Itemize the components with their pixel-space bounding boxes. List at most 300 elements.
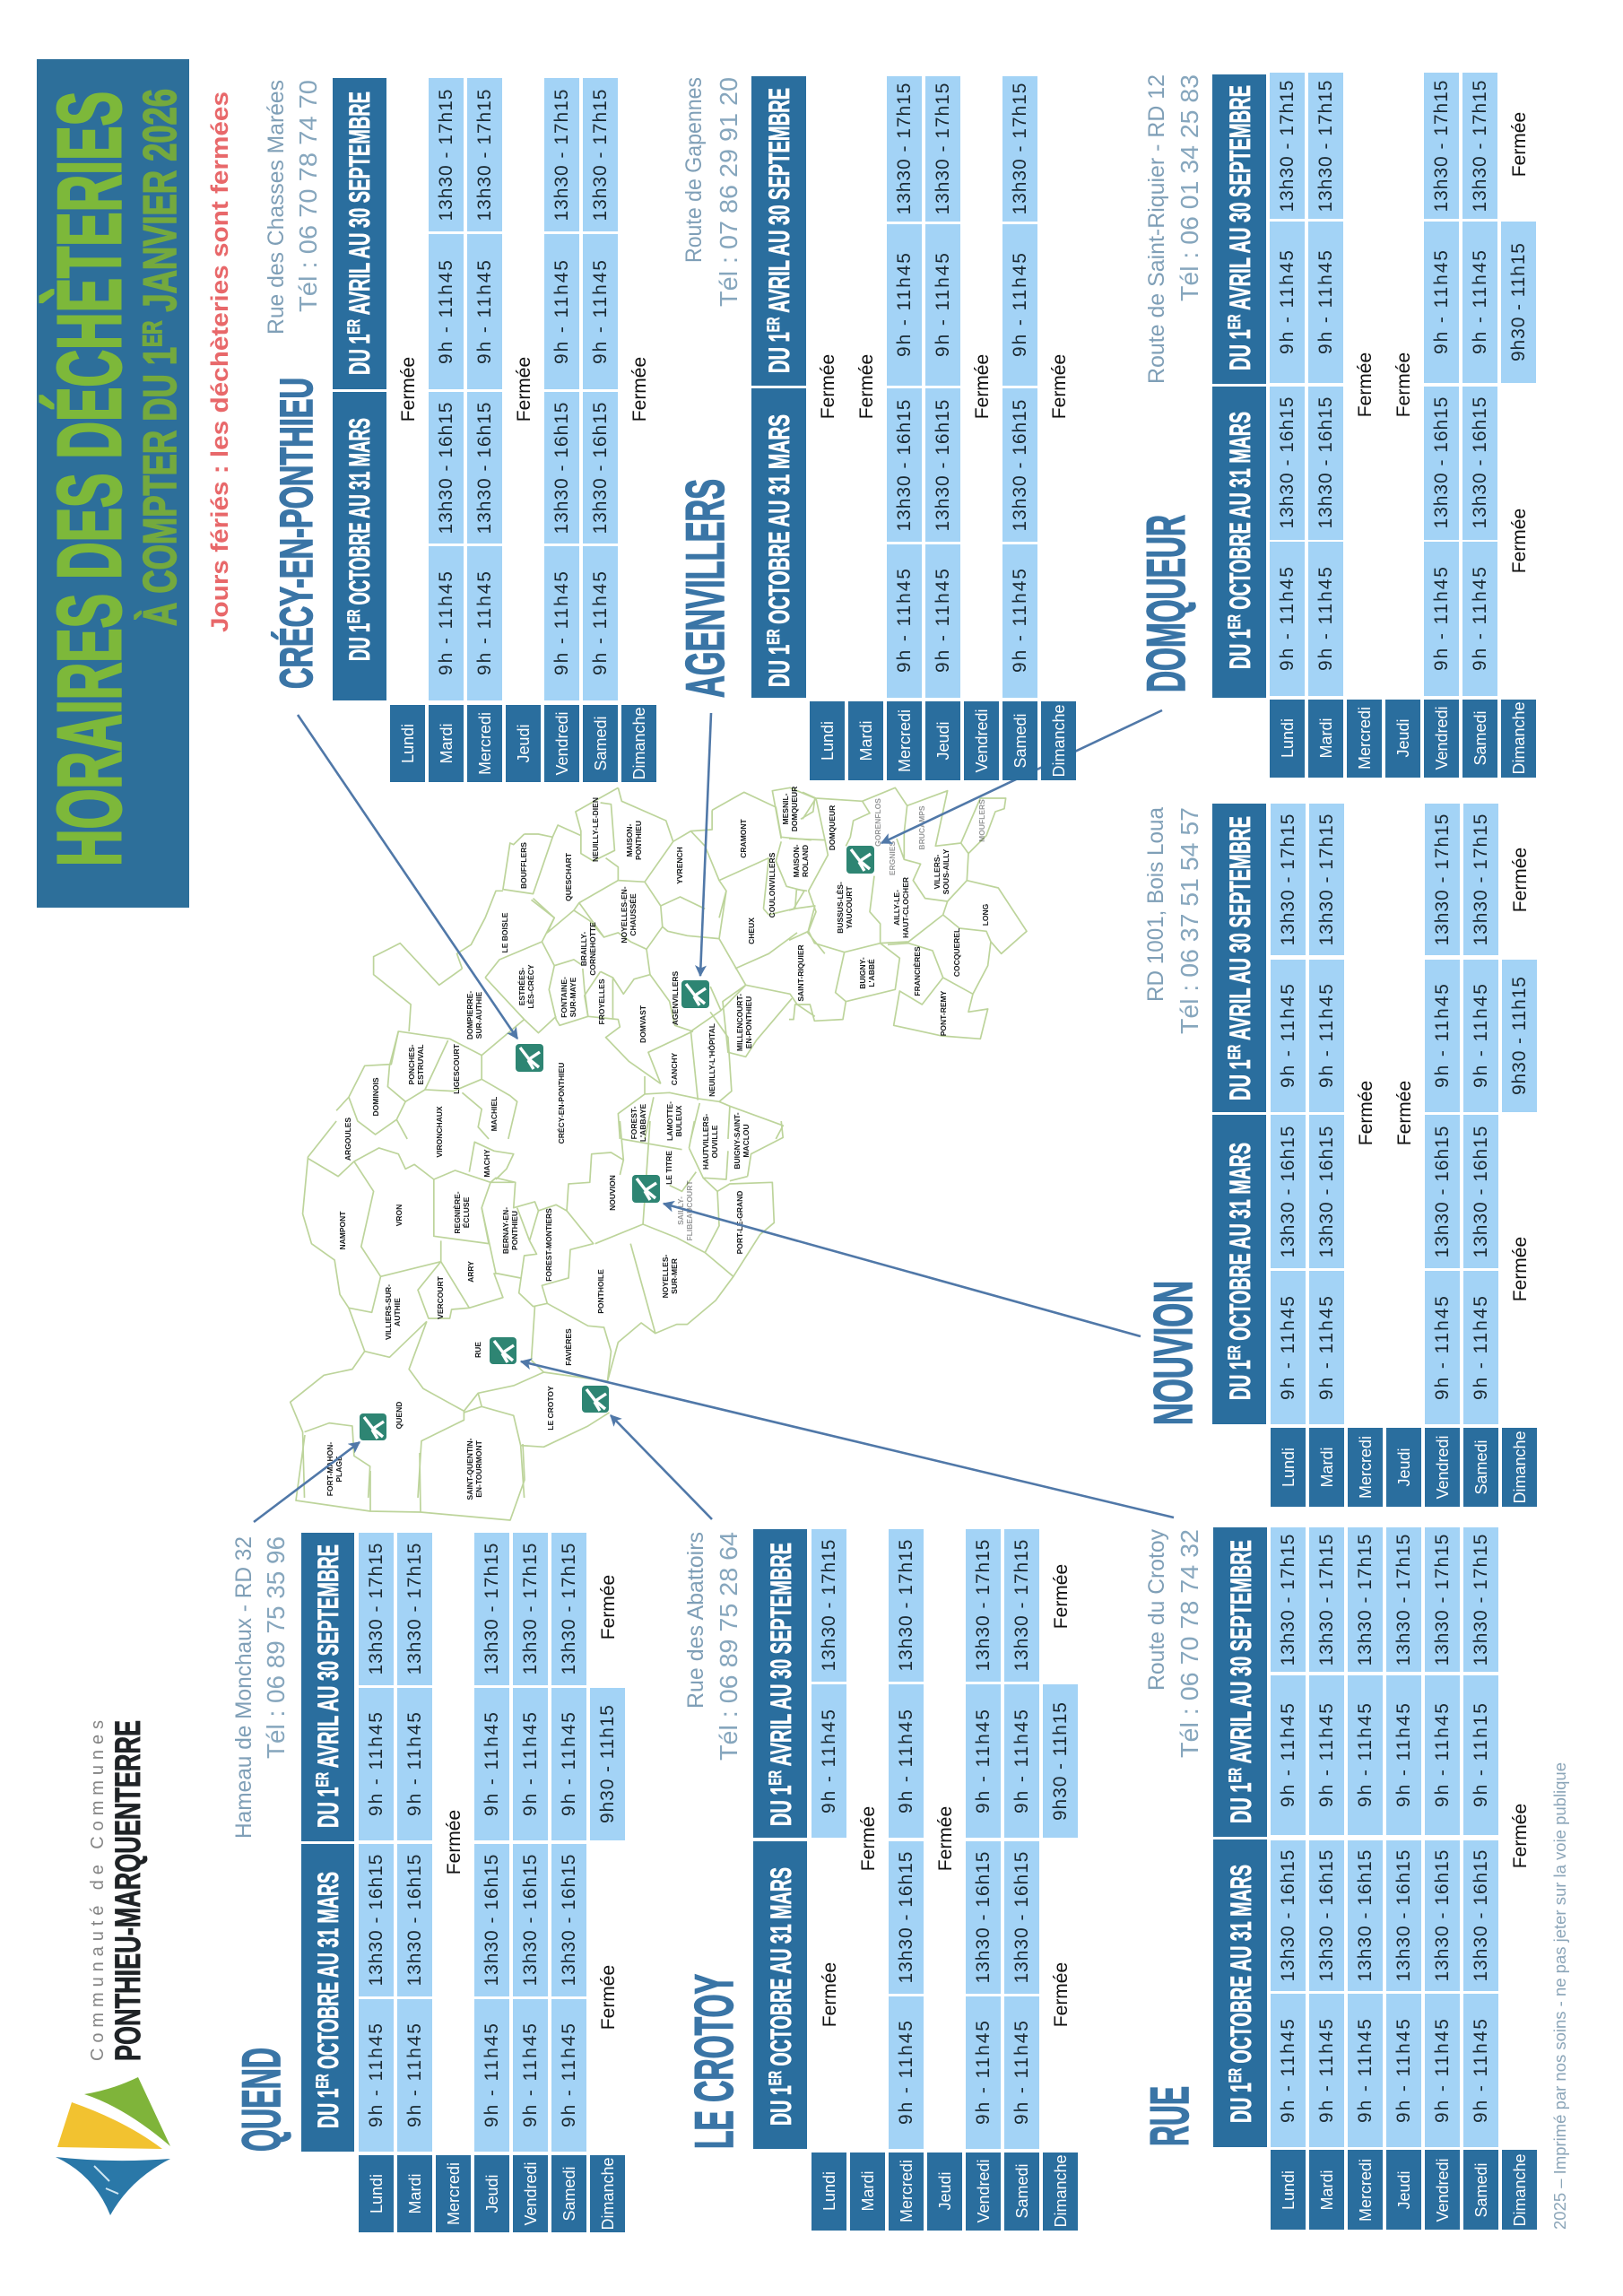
commune labels: BULEUX	[674, 1105, 683, 1136]
row: Samedi: 9h - 11h45	[1470, 250, 1490, 354]
row: Mardi: Mardi	[438, 723, 456, 764]
commune labels: SAINT-QUENTIN-	[465, 1438, 474, 1500]
commune labels: LE CROTOY	[546, 1386, 555, 1431]
address: Nouvion: Tél : 06 37 51 54 57	[1176, 807, 1203, 1034]
row: Mercredi: 9h - 11h45	[894, 569, 915, 673]
row: Dimanche: Fermée	[1510, 1804, 1531, 1868]
row: Dimanche	[1043, 1564, 1078, 2231]
row: Dimanche: Fermée	[1051, 1564, 1072, 1629]
table: Domqueur hours: ER	[1226, 314, 1245, 329]
row: Vendredi: 9h - 11h45	[1432, 984, 1453, 1088]
row: Jeudi	[1386, 1527, 1421, 2230]
commune labels: OUVILLE	[710, 1125, 719, 1158]
commune labels: CRÉCY-EN-PONTHIEU	[557, 1063, 566, 1144]
commune labels: FORT-MAHON-	[325, 1442, 334, 1496]
row: Mercredi: 13h30 - 16h15	[474, 402, 495, 535]
heading: Quend: QUEND	[231, 2048, 291, 2152]
row: Jeudi: Jeudi	[936, 2171, 954, 2211]
table: Agenvillers hours	[751, 76, 1076, 780]
commune labels: FAVIÈRES	[564, 1328, 573, 1366]
row: Dimanche: Dimanche	[630, 707, 648, 780]
row: Mardi: Fermée	[858, 1806, 879, 1871]
row: Vendredi: 9h - 11h45	[973, 2021, 994, 2125]
commune labels: COULONVILLERS	[768, 852, 777, 918]
row: Samedi: 9h - 11h45	[1010, 253, 1030, 357]
row: Lundi: 13h30 - 17h15	[819, 1539, 839, 1672]
table: Quend hours: DU 1	[312, 2063, 344, 2128]
commune labels: FOREST-	[629, 1106, 638, 1139]
logo: Communauté de Communes Ponthieu-Marquenterre	[56, 1720, 170, 2215]
address: Nouvion: RD 1001, Bois Loua	[1143, 807, 1168, 1002]
commune labels: YVRENCH	[675, 847, 684, 884]
icon: Quend site marker	[360, 1413, 386, 1440]
commune labels	[325, 787, 990, 1500]
row: Samedi	[1463, 804, 1498, 1507]
row: Mardi: 13h30 - 17h15	[1315, 81, 1336, 212]
table: Le Crotoy hours	[753, 1529, 1078, 2231]
row: Mardi: 13h30 - 17h15	[404, 1543, 425, 1675]
row: Vendredi	[1425, 804, 1460, 1507]
commune labels: REGNIÈRE-	[453, 1191, 462, 1234]
commune labels: VILLERS-	[933, 854, 942, 889]
address: Agenvillers: Tél : 07 86 29 91 20	[715, 77, 742, 307]
row: Jeudi: 13h30 - 17h15	[1393, 1534, 1414, 1666]
row: Mercredi: Fermée	[444, 1810, 464, 1874]
commune labels: FONTAINE-	[560, 977, 568, 1018]
address: Quend: Hameau de Monchaux - RD 32	[231, 1536, 256, 1839]
row: Samedi: 13h30 - 17h15	[590, 90, 611, 221]
address: Crécy-en-Ponthieu: Tél : 06 70 78 74 70	[294, 80, 322, 312]
row: Samedi: Samedi	[592, 716, 610, 771]
table: Domqueur hours: DU 1	[1224, 305, 1256, 370]
commune labels: CHEUX	[747, 918, 756, 944]
row: Vendredi: 9h - 11h45	[1431, 250, 1452, 354]
icon: Rue site marker	[490, 1337, 516, 1364]
row: Dimanche: Dimanche	[599, 2157, 617, 2231]
table: Agenvillers hours: DU 1	[763, 308, 795, 373]
row: Mardi: 9h - 11h45	[436, 260, 456, 364]
address: Nouvion	[1143, 807, 1203, 1034]
address: Crécy-en-Ponthieu: Rue des Chasses Marées	[264, 80, 289, 335]
row: Lundi: 13h30 - 16h15	[1278, 1126, 1298, 1257]
row: Mardi	[1308, 73, 1343, 778]
commune labels: FOREST-MONTIERS	[544, 1208, 553, 1282]
table: Nouvion hours: AVRIL AU 30 SEPTEMBRE	[1224, 816, 1256, 1045]
commune labels: PONTHIEU	[634, 821, 643, 860]
row: Lundi: Lundi	[399, 724, 417, 763]
row: Lundi	[1270, 73, 1305, 778]
arrow: Le Crotoy	[611, 1415, 712, 1519]
heading: Nouvion: NOUVION	[1143, 1281, 1203, 1425]
commune labels: COCQUEREL	[952, 928, 961, 977]
row: Mercredi: Mercredi	[896, 709, 914, 772]
commune labels: BERNAY-EN-	[501, 1207, 510, 1254]
table: Nouvion hours	[1212, 804, 1537, 1507]
commune labels: PLAGE	[334, 1456, 343, 1483]
table: Agenvillers hours: OCTOBRE AU 31 MARS	[763, 414, 795, 630]
commune labels: PONCHES-	[407, 1044, 416, 1084]
commune labels: DOMQUEUR	[828, 805, 837, 850]
commune labels: VILLIERS-SUR-	[384, 1284, 393, 1340]
panel: Quend	[231, 1533, 625, 2232]
panel: Le Crotoy	[683, 1529, 1078, 2231]
row: Dimanche: 9h30 - 11h15	[1509, 977, 1530, 1095]
row: Mercredi	[1348, 1081, 1383, 1507]
address: Crécy-en-Ponthieu	[264, 80, 322, 335]
row: Mardi: 13h30 - 16h15	[1316, 1849, 1337, 1982]
table: Le Crotoy hours: ER	[767, 1770, 785, 1786]
commune labels: YAUCOURT	[845, 886, 854, 929]
row: Lundi: 9h - 11h45	[1278, 2019, 1298, 2123]
commune labels: SUR-MER	[670, 1258, 679, 1294]
row: Lundi: Lundi	[819, 721, 837, 761]
row: Vendredi	[544, 78, 579, 782]
row: Mardi: Fermée	[856, 354, 877, 419]
row: Vendredi: 13h30 - 17h15	[520, 1543, 541, 1675]
commune labels: AILLY-LE-	[892, 890, 901, 926]
row: Lundi: Lundi	[820, 2171, 838, 2211]
row: Samedi: 13h30 - 16h15	[1011, 1851, 1032, 1984]
commune labels: CRAMONT	[739, 818, 748, 858]
row: Vendredi: 9h - 11h45	[520, 2023, 541, 2127]
row: Samedi: 13h30 - 16h15	[1471, 1849, 1491, 1982]
row: Mercredi: 9h - 11h45	[894, 253, 915, 357]
row: Jeudi	[474, 1533, 509, 2232]
arrow: Domqueur	[881, 710, 1162, 843]
row: Mercredi: 9h - 11h45	[896, 1709, 916, 1813]
row: Jeudi: Fermée	[935, 1806, 956, 1871]
row: Samedi: 13h30 - 17h15	[1010, 83, 1030, 215]
commune labels: BRAILLY-	[579, 932, 588, 966]
commune labels: NEUILLY-LE-DIEN	[591, 797, 600, 862]
row: Samedi: 9h - 11h45	[1471, 1296, 1491, 1400]
arrow: Quend	[254, 1442, 360, 1522]
row: Mardi: 9h - 11h45	[1316, 1296, 1337, 1400]
table: Quend hours: AVRIL AU 30 SEPTEMBRE	[312, 1544, 344, 1772]
row: Dimanche	[590, 1575, 625, 2232]
table: Domqueur hours: OCTOBRE AU 31 MARS	[1224, 412, 1256, 614]
row: Samedi	[1462, 73, 1497, 778]
commune labels: FRANCIÈRES	[913, 946, 922, 996]
row: Mercredi: 13h30 - 17h15	[894, 83, 915, 215]
row: Mardi: Mardi	[857, 720, 875, 761]
table: Agenvillers hours: ER	[765, 629, 784, 645]
row: Samedi: Samedi	[1472, 2162, 1490, 2218]
table: Crécy-en-Ponthieu hours	[333, 78, 656, 782]
row: Mercredi: Fermée	[1355, 352, 1376, 417]
icon: Crécy site marker	[516, 1044, 543, 1072]
commune labels: PONTHOILE	[596, 1269, 605, 1314]
row: Mardi	[848, 354, 883, 780]
panel: Nouvion	[1143, 804, 1537, 1507]
row: Dimanche: Fermée	[1510, 1237, 1531, 1301]
address: Domqueur: Tél : 06 01 34 25 83	[1176, 74, 1203, 301]
table: Crécy-en-Ponthieu hours: ER	[345, 609, 364, 623]
address: Quend: Tél : 06 89 75 35 96	[262, 1536, 290, 1759]
row: Dimanche	[1041, 354, 1076, 780]
row: Dimanche: Dimanche	[1511, 2153, 1529, 2227]
icon: Domqueur site marker	[846, 846, 874, 874]
table: Nouvion hours: ER	[1226, 1045, 1245, 1059]
row: Jeudi: Fermée	[1394, 1081, 1415, 1145]
commune labels: MAISON-	[792, 844, 801, 877]
row: Mercredi: 13h30 - 17h15	[474, 90, 495, 221]
table: Quend hours: DU 1	[312, 1762, 344, 1828]
row: Mardi: 9h - 11h45	[1316, 984, 1337, 1088]
row: Samedi: 13h30 - 16h15	[559, 1855, 579, 1986]
commune labels: EN-TOURMONT	[474, 1439, 483, 1498]
commune labels: CORNEHOTTE	[588, 922, 597, 976]
commune labels: EN-PONTHIEU	[744, 996, 753, 1048]
row: Mardi: Mardi	[1318, 2170, 1336, 2211]
row: Mardi: 9h - 11h45	[436, 571, 456, 675]
row: Mardi: 9h - 11h45	[1316, 2019, 1337, 2123]
commune labels: LE TITRE	[664, 1151, 673, 1185]
row: Samedi: 13h30 - 17h15	[559, 1543, 579, 1675]
panel: Crécy-en-Ponthieu	[264, 78, 656, 782]
row: Samedi: 9h - 11h45	[1470, 567, 1490, 671]
row: Samedi: 9h - 11h15	[1471, 1703, 1491, 1807]
map of communes	[291, 787, 1027, 1520]
address: Rue: Route du Crotoy	[1144, 1529, 1169, 1691]
row: Vendredi: 13h30 - 17h15	[1432, 814, 1453, 945]
commune labels: MESNIL-	[781, 793, 790, 824]
commune labels: DOMQUEUR	[790, 787, 799, 831]
row: Dimanche: Fermée	[1051, 1962, 1072, 2027]
row: Lundi: 9h - 11h45	[1277, 250, 1298, 354]
row: Lundi: 13h30 - 17h15	[366, 1543, 386, 1675]
table: Quend hours: ER	[314, 2074, 333, 2089]
row: Jeudi	[1385, 352, 1420, 778]
commune labels: SOUS-AILLY	[942, 848, 950, 894]
commune labels: ESTRÉES-	[517, 968, 526, 1005]
row: Lundi: 13h30 - 17h15	[1278, 1534, 1298, 1666]
row: Lundi	[359, 1533, 394, 2232]
row: Vendredi: 9h - 11h45	[520, 1712, 541, 1816]
icon: Agenvillers site marker	[681, 980, 709, 1008]
row: Vendredi: Fermée	[972, 354, 993, 419]
row: Vendredi: 9h - 11h45	[551, 571, 572, 675]
row: Samedi: Samedi	[560, 2166, 578, 2222]
commune labels: SAILLY-	[676, 1196, 685, 1225]
commune labels: LIGESCOURT	[452, 1043, 461, 1094]
commune labels: AGENVILLERS	[671, 970, 680, 1025]
row: Lundi: 9h - 11h45	[819, 1709, 839, 1813]
row: Mardi: 13h30 - 16h15	[436, 402, 456, 535]
row: Mercredi: Mercredi	[476, 712, 494, 775]
row: Vendredi: 13h30 - 16h15	[973, 1851, 994, 1984]
table: Agenvillers hours: DU 1	[763, 622, 795, 687]
row: Mercredi	[1347, 352, 1382, 778]
row: Vendredi: 13h30 - 16h15	[1432, 1126, 1453, 1257]
row: Vendredi: 9h - 11h45	[973, 1709, 994, 1813]
row: Dimanche	[1501, 112, 1536, 778]
table: Crécy-en-Ponthieu hours: DU 1	[343, 596, 376, 661]
row: Jeudi: Jeudi	[1395, 2170, 1413, 2210]
table: Le Crotoy hours: DU 1	[765, 1761, 797, 1826]
table: Rue hours: ER	[1227, 1768, 1245, 1783]
row: Mardi	[1309, 1527, 1344, 2230]
row: Samedi: 13h30 - 17h15	[1471, 814, 1491, 945]
table: Nouvion hours: OCTOBRE AU 31 MARS	[1224, 1143, 1256, 1345]
heading: Domqueur: DOMQUEUR	[1136, 515, 1196, 692]
row: Mardi: 9h - 11h45	[404, 1712, 425, 1816]
row: Vendredi	[513, 1533, 548, 2232]
table: Rue hours	[1213, 1527, 1537, 2230]
row: Jeudi	[927, 1806, 962, 2231]
table: Nouvion hours: DU 1	[1224, 1335, 1256, 1400]
arrow: Crécy	[298, 715, 517, 1039]
row: Jeudi: 9h - 11h45	[482, 1712, 502, 1816]
row: Dimanche	[1502, 1804, 1537, 2230]
row: Dimanche	[621, 357, 656, 782]
commune labels: ARGOULES	[343, 1118, 352, 1161]
row: Vendredi: 13h30 - 16h15	[520, 1855, 541, 1986]
row: Lundi: 9h - 11h45	[1278, 984, 1298, 1088]
row: Mardi: 9h - 11h45	[1315, 567, 1336, 671]
row: Dimanche: Fermée	[1510, 848, 1531, 912]
row: Vendredi: 9h - 11h45	[1432, 1703, 1453, 1807]
commune labels: NAMPONT	[338, 1211, 347, 1249]
table: Crécy-en-Ponthieu hours: ER	[345, 319, 364, 335]
row: Mercredi	[889, 1529, 924, 2231]
row: Mardi: 13h30 - 16h15	[1315, 396, 1336, 529]
row: Vendredi: 13h30 - 17h15	[1432, 1534, 1453, 1666]
commune labels: VRON	[395, 1205, 404, 1226]
table: Quend hours: ER	[314, 1772, 333, 1787]
row: Mardi: Mardi	[1318, 1447, 1336, 1488]
heading: Crécy-en-Ponthieu: CRÉCY-EN-PONTHIEU	[271, 378, 322, 689]
row: Mercredi: Fermée	[1356, 1081, 1376, 1145]
table: Le Crotoy hours: ER	[767, 2071, 785, 2085]
table: Agenvillers hours: ER	[765, 317, 784, 332]
row: Mercredi: 9h - 11h45	[474, 260, 495, 364]
table: Le Crotoy hours: AVRIL AU 30 SEPTEMBRE	[765, 1543, 797, 1770]
row: Mercredi: Mercredi	[1356, 707, 1374, 770]
row: Vendredi: Vendredi	[975, 2159, 993, 2223]
row: Jeudi: 9h - 11h45	[482, 2023, 502, 2127]
row: Samedi: 13h30 - 16h15	[1471, 1126, 1491, 1257]
row: Samedi: 9h - 11h45	[1010, 569, 1030, 673]
commune labels: FLIBEAUCOURT	[685, 1180, 694, 1241]
table: Rue hours: AVRIL AU 30 SEPTEMBRE	[1225, 1540, 1257, 1768]
row: Vendredi: 9h - 11h45	[1432, 1296, 1453, 1400]
row: Mercredi: 13h30 - 16h15	[1355, 1849, 1376, 1982]
address: Domqueur: Route de Saint-Riquier - RD 12	[1144, 74, 1169, 384]
row: Lundi: 13h30 - 16h15	[1278, 1849, 1298, 1982]
row: Samedi	[1004, 1529, 1039, 2231]
row: Vendredi: 13h30 - 17h15	[973, 1539, 994, 1672]
row: Samedi: 9h - 11h45	[559, 2023, 579, 2127]
arrow: Agenvillers	[700, 713, 711, 976]
commune labels: MACHIEL	[490, 1097, 499, 1131]
address: Agenvillers	[681, 77, 742, 307]
table: Domqueur hours: DU 1	[1224, 604, 1256, 669]
footer note: 2025 – Imprimé par nos soins - ne pas jeter sur la voie publique	[1551, 1762, 1569, 2230]
table: Rue hours: DU 1	[1225, 2057, 1257, 2123]
commune labels: MACHY	[482, 1149, 491, 1178]
table: Nouvion hours: ER	[1226, 1345, 1245, 1360]
row: Samedi: 13h30 - 17h15	[1011, 1539, 1032, 1672]
title banner: À COMPTER DU 1	[135, 227, 187, 626]
table: Nouvion hours: DU 1	[1224, 1035, 1256, 1100]
row: Jeudi: Jeudi	[1394, 718, 1412, 758]
address: Agenvillers: Route de Gapennes	[681, 77, 707, 263]
commune labels: MILLENCOURT-	[735, 994, 744, 1051]
commune labels: LONG	[981, 903, 990, 926]
row: Vendredi: 9h - 11h45	[1432, 2019, 1453, 2123]
row: Vendredi: 13h30 - 17h15	[551, 90, 572, 221]
row: Lundi: Lundi	[1280, 2170, 1298, 2210]
commune labels: MOUFLERS	[977, 799, 986, 842]
row: Samedi	[1463, 1527, 1498, 2230]
row: Mercredi: 9h - 11h45	[1355, 2019, 1376, 2123]
commune labels: QUESCHART	[564, 852, 573, 901]
row: Samedi: 9h - 11h45	[1471, 2019, 1491, 2123]
row: Mardi: 13h30 - 17h15	[1316, 814, 1337, 945]
row: Vendredi: 13h30 - 16h15	[1432, 1849, 1453, 1982]
row: Jeudi: 13h30 - 16h15	[1393, 1849, 1414, 1982]
title banner: ER	[138, 320, 168, 347]
row: Vendredi: 9h - 11h45	[1431, 567, 1452, 671]
heading: Le Crotoy: LE CROTOY	[684, 1974, 744, 2149]
row: Dimanche: 9h30 - 11h15	[1508, 243, 1529, 361]
commune labels: VIRONCHAUX	[435, 1106, 444, 1158]
table: Rue hours: DU 1	[1225, 1758, 1257, 1823]
commune labels: PORT-LE-GRAND	[735, 1191, 744, 1254]
row: Lundi	[1271, 804, 1306, 1507]
row: Lundi: 9h - 11h45	[366, 2023, 386, 2127]
title banner	[37, 59, 189, 908]
row: Lundi: 13h30 - 16h15	[366, 1855, 386, 1986]
row: Samedi: 9h - 11h45	[1471, 984, 1491, 1088]
row: Vendredi: Vendredi	[973, 709, 991, 773]
row: Jeudi: 13h30 - 17h15	[933, 83, 953, 215]
commune labels: ARRY	[466, 1261, 475, 1283]
table: Crécy-en-Ponthieu hours: OCTOBRE AU 31 MARS	[343, 418, 376, 610]
row: Vendredi	[966, 1529, 1001, 2231]
row: Lundi: 13h30 - 17h15	[1277, 81, 1298, 212]
row: Dimanche: 9h30 - 11h15	[597, 1705, 618, 1823]
row: Samedi	[1002, 76, 1037, 780]
row: Mardi: 13h30 - 16h15	[1316, 1126, 1337, 1257]
commune labels: BUSSUS-LÈS-	[836, 882, 845, 934]
row: Lundi: 9h - 11h45	[366, 1712, 386, 1816]
commune labels: SUR-AUTHIE	[474, 991, 483, 1039]
commune labels: CHAUSSÉE	[629, 893, 638, 936]
row: Mardi: 13h30 - 17h15	[1316, 1534, 1337, 1666]
row: Mercredi: 9h - 11h45	[474, 571, 495, 675]
row: Samedi: 13h30 - 16h15	[1010, 400, 1030, 531]
row: Dimanche: Dimanche	[1511, 1431, 1529, 1504]
row: Dimanche: Dimanche	[1050, 704, 1068, 778]
row: Jeudi: 9h - 11h45	[1393, 2019, 1414, 2123]
commune labels: FROYELLES	[597, 978, 606, 1025]
row: Samedi: Samedi	[1011, 713, 1029, 769]
row: Lundi: Fermée	[820, 1962, 840, 2027]
row: Dimanche	[1502, 848, 1537, 1507]
commune labels: SAINT-RIQUIER	[796, 944, 805, 1002]
commune labels: L'ABBÉ	[867, 959, 876, 987]
row: Jeudi: Jeudi	[934, 721, 952, 761]
row: Lundi	[390, 357, 425, 782]
row: Mercredi: 13h30 - 16h15	[896, 1851, 916, 1984]
row: Mardi: Mardi	[406, 2173, 424, 2214]
commune labels: ERGNIES	[888, 841, 897, 875]
row: Vendredi: Vendredi	[1434, 2158, 1452, 2222]
commune labels: LE BOISLE	[500, 912, 509, 952]
row: Jeudi: 9h - 11h45	[933, 569, 953, 673]
